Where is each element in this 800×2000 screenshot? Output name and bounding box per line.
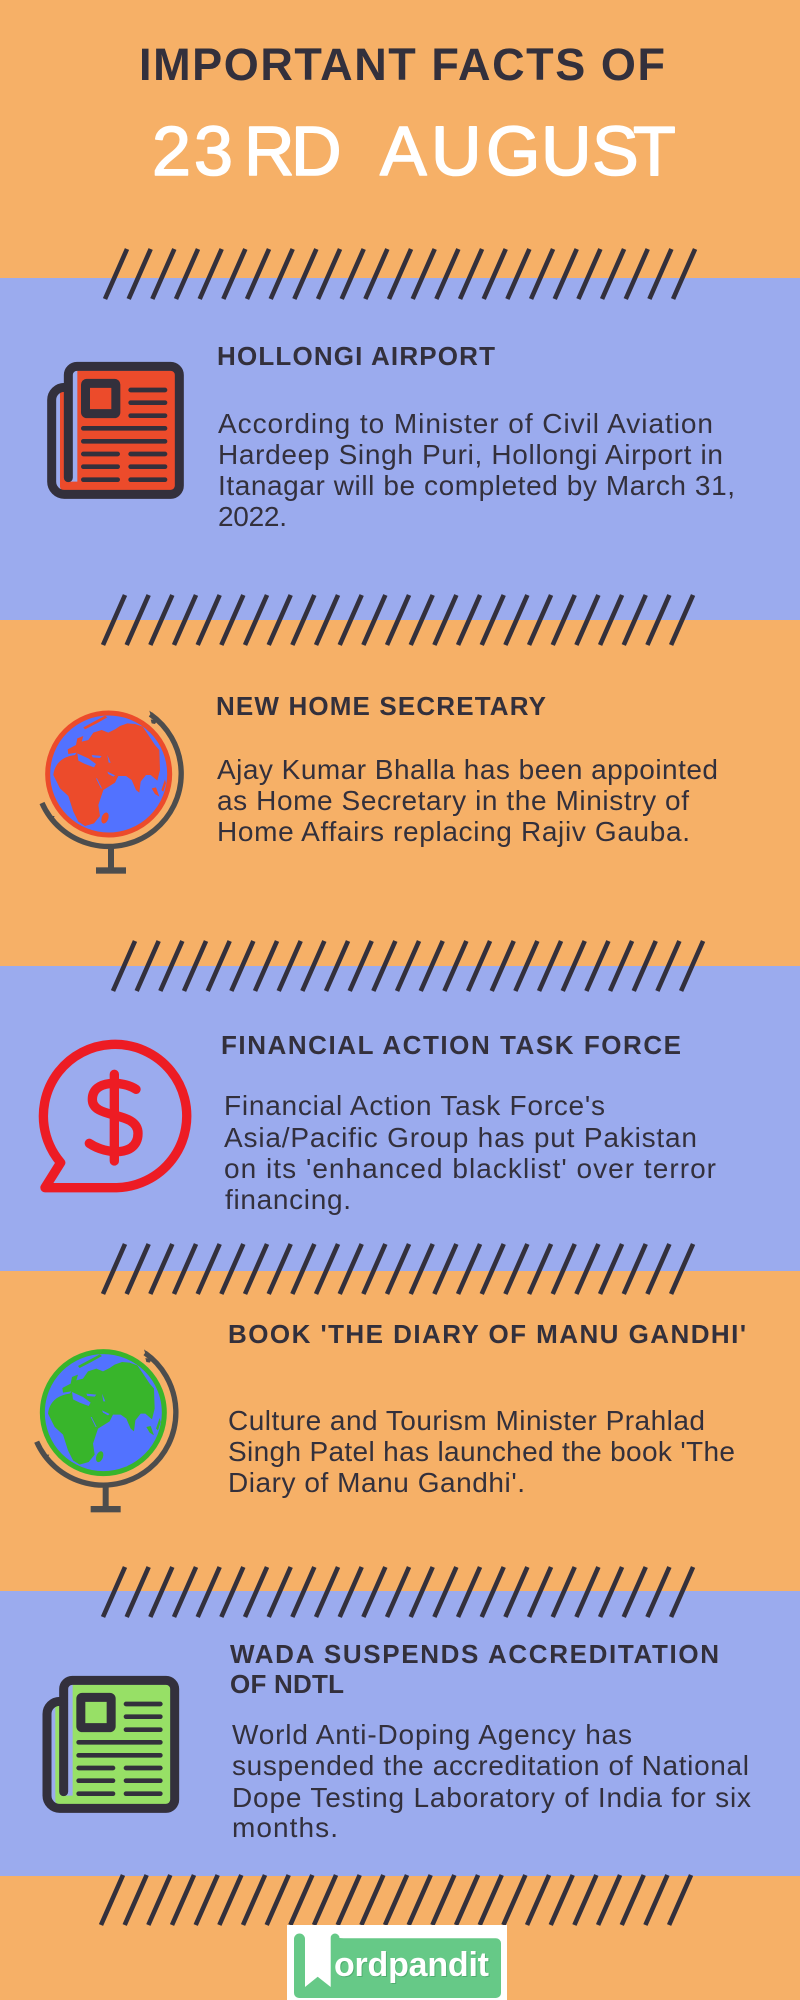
panel band: Hollongi Airport — [0, 278, 800, 620]
text block: WADA: suspended the accreditation of National — [232, 1750, 749, 1781]
text block: New Home Secretary — [217, 754, 718, 847]
title: 23rd August: 23RD AUGUST — [152, 112, 676, 190]
heading: WADA Suspends Accreditation of NDTL: OF NDTL — [230, 1669, 344, 1699]
logo: Wordpandit — [287, 1925, 507, 2000]
text block: New Home Secretary: Home Affairs replacing Rajiv Gauba. — [217, 816, 690, 847]
panel band: WADA — [0, 1591, 800, 1876]
panel band: Financial Action Task Force — [0, 966, 800, 1271]
icon: green newspaper — [47, 1680, 175, 1808]
title: Important Facts Of: IMPORTANT FACTS OF — [139, 39, 665, 90]
text block: Hollongi Airport — [218, 408, 735, 532]
logo: Wordpandit: ordpandit — [334, 1946, 489, 1984]
text block: Book The Diary of Manu Gandhi: Culture and Tourism Minister Prahlad — [228, 1405, 705, 1436]
text block: Book The Diary of Manu Gandhi — [228, 1405, 735, 1498]
icon: dollar speech bubble — [43, 1044, 187, 1188]
text block: WADA: Dope Testing Laboratory of India for six — [232, 1782, 751, 1813]
text block: Financial Action Task Force: financing. — [225, 1184, 351, 1215]
text block: WADA: World Anti-Doping Agency has — [232, 1719, 632, 1750]
text block: Hollongi Airport: 2022. — [218, 501, 287, 532]
heading: New Home Secretary: NEW HOME SECRETARY — [216, 691, 546, 721]
text block: Hollongi Airport: Itanagar will be completed by March 31, — [218, 470, 735, 501]
heading: Financial Action Task Force: FINANCIAL ACTION TASK FORCE — [221, 1030, 681, 1060]
text block: New Home Secretary: as Home Secretary in the Ministry of — [217, 785, 689, 816]
text block: Financial Action Task Force: Financial Action Task Force's — [224, 1090, 605, 1121]
text block: Financial Action Task Force: Asia/Pacific Group has put Pakistan — [224, 1122, 697, 1153]
icon: green globe — [37, 1349, 176, 1512]
text block: Hollongi Airport: According to Minister of Civil Aviation — [218, 408, 713, 439]
icon: red newspaper — [52, 366, 179, 494]
icon: red globe — [42, 711, 181, 874]
text block: WADA: months. — [232, 1812, 338, 1843]
text block: New Home Secretary: Ajay Kumar Bhalla has been appointed — [217, 754, 718, 785]
text block: WADA — [232, 1719, 751, 1843]
heading: WADA Suspends Accreditation of NDTL: WADA SUSPENDS ACCREDITATION — [230, 1639, 719, 1669]
text block: Hollongi Airport: Hardeep Singh Puri, Hollongi Airport in — [218, 439, 723, 470]
heading: WADA Suspends Accreditation of NDTL — [230, 1639, 719, 1699]
heading: Book The Diary of Manu Gandhi: BOOK 'THE DIARY OF MANU GANDHI' — [228, 1319, 746, 1349]
text block: Financial Action Task Force — [224, 1090, 716, 1215]
text block: Book The Diary of Manu Gandhi: Singh Patel has launched the book 'The — [228, 1436, 735, 1467]
heading: Hollongi Airport: HOLLONGI AIRPORT — [217, 341, 495, 371]
text block: Financial Action Task Force: on its 'enhanced blacklist' over terror — [224, 1153, 716, 1184]
text block: Book The Diary of Manu Gandhi: Diary of Manu Gandhi'. — [228, 1467, 525, 1498]
